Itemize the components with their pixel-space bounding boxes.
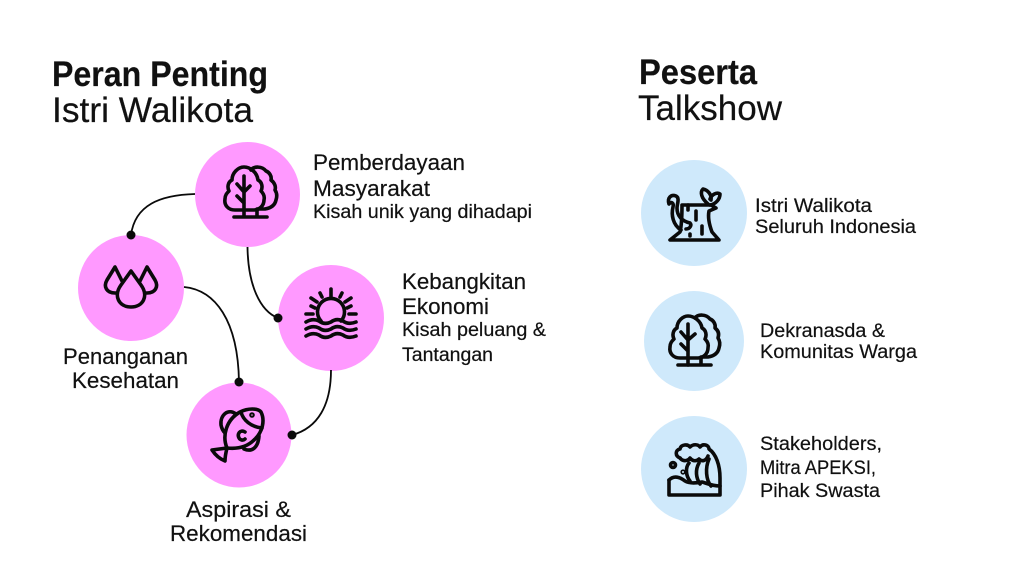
text: dekranasda dan komunitas warga [760, 321, 917, 363]
text: kebangkitan ekonomi: Tantangan [402, 345, 493, 366]
text: kebangkitan ekonomi: Kisah peluang & [402, 320, 546, 341]
text: penanganan kesehatan: Penanganan [63, 344, 188, 369]
circle: penanganan kesehatan [78, 235, 184, 341]
text: pemberdayaan masyarakat: Masyarakat [313, 176, 430, 201]
text: dekranasda dan komunitas warga: Dekranasda & [760, 321, 885, 342]
heading: peran penting istri walikota [52, 55, 268, 130]
text: pemberdayaan masyarakat: Kisah unik yang dihadapi [313, 202, 532, 223]
connector: ekonomi to aspirasi [288, 370, 331, 440]
text: aspirasi dan rekomendasi [170, 497, 307, 546]
icon: trees [670, 315, 720, 365]
text: pemberdayaan masyarakat [313, 150, 532, 223]
text: aspirasi dan rekomendasi: Rekomendasi [170, 521, 307, 546]
heading: peserta talkshow: Peserta [639, 53, 757, 92]
circle: stakeholders [641, 416, 747, 522]
text: stakeholders, mitra, swasta: Mitra APEKSI, [760, 458, 876, 479]
circle: dekranasda [644, 291, 744, 391]
connector: pemberdayaan to kesehatan [126, 194, 195, 240]
heading: peran penting istri walikota: Istri Walikota [52, 91, 254, 130]
connector: kesehatan to aspirasi [184, 287, 244, 386]
icon: water drops [105, 267, 157, 307]
circle: aspirasi dan rekomendasi [186, 382, 292, 488]
icon: fish [212, 409, 263, 461]
text: stakeholders, mitra, swasta: Stakeholders, [760, 434, 882, 455]
icon: sun over waves [306, 289, 356, 337]
icon: ocean wave [669, 445, 720, 495]
circle: istri walikota [641, 160, 747, 266]
text: dekranasda dan komunitas warga: Komunitas Warga [760, 342, 917, 363]
panel: peserta talkshow [638, 53, 917, 522]
heading: peran penting istri walikota: Peran Penting [52, 55, 268, 94]
circle: kebangkitan ekonomi [278, 265, 384, 371]
icon: trees [225, 167, 277, 217]
icon: tree stump with leaves [668, 189, 720, 240]
text: istri walikota seluruh indonesia: Seluruh Indonesia [755, 217, 916, 238]
panel: peran penting [52, 55, 546, 546]
text: aspirasi dan rekomendasi: Aspirasi & [186, 497, 291, 522]
text: istri walikota seluruh indonesia: Istri Walikota [755, 196, 872, 217]
heading: peserta talkshow [638, 53, 783, 128]
text: kebangkitan ekonomi: Ekonomi [402, 294, 489, 319]
text: stakeholders, mitra, swasta: Pihak Swasta [760, 481, 880, 502]
text: stakeholders, mitra, swasta [760, 434, 882, 502]
text: penanganan kesehatan [63, 344, 188, 393]
text: kebangkitan ekonomi [402, 269, 546, 366]
text: istri walikota seluruh indonesia [755, 196, 916, 238]
connector: pemberdayaan to ekonomi [248, 247, 282, 322]
text: pemberdayaan masyarakat: Pemberdayaan [313, 150, 465, 175]
heading: peserta talkshow: Talkshow [638, 89, 783, 128]
text: kebangkitan ekonomi: Kebangkitan [402, 269, 526, 294]
text: penanganan kesehatan: Kesehatan [72, 368, 179, 393]
circle: pemberdayaan masyarakat [195, 142, 300, 247]
